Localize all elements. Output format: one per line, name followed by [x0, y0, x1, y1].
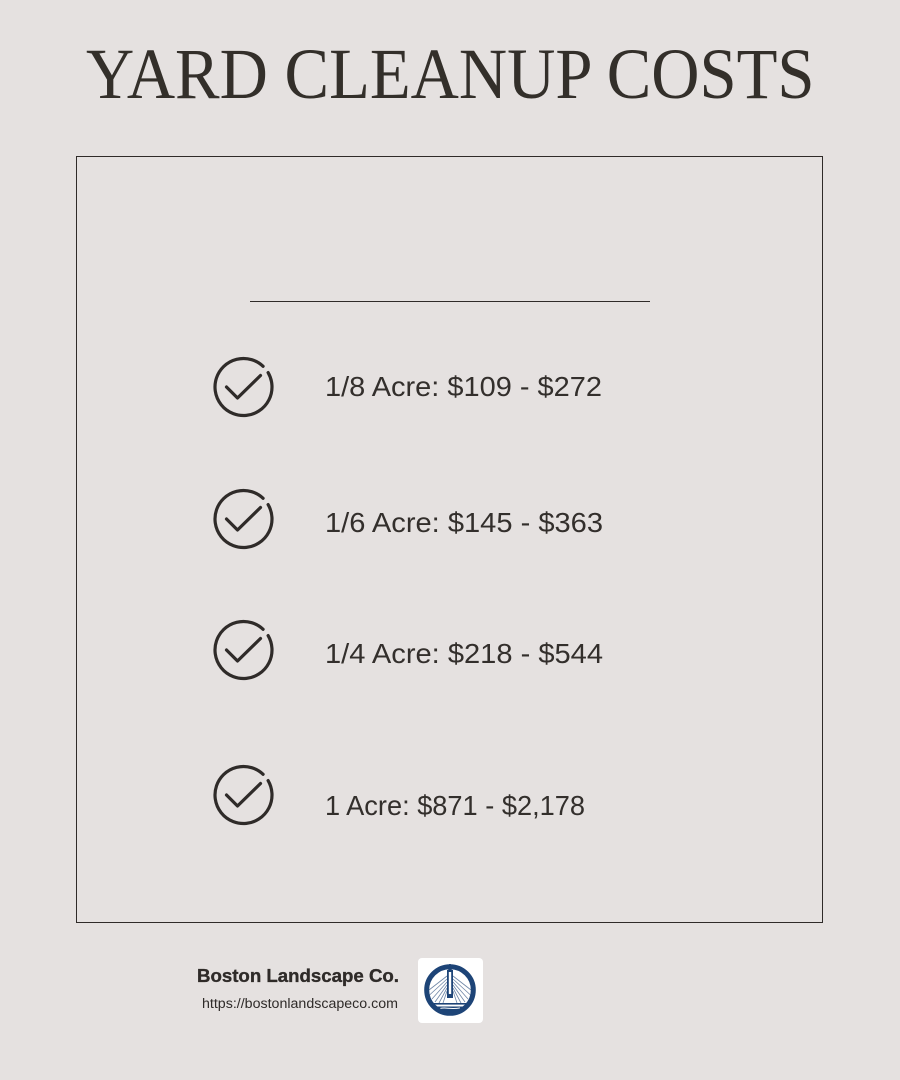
panel: cost list frame — [76, 156, 822, 922]
icon: check 1/8 acre — [215, 358, 272, 415]
icon: check 1 acre — [215, 766, 272, 823]
icon: check 1/4 acre — [215, 621, 272, 678]
logo: bridge badge — [418, 958, 483, 1023]
text: 1/4 acre cost: 1/4 Acre: $218 - $544 — [325, 638, 603, 669]
text: 1/6 acre cost: 1/6 Acre: $145 - $363 — [325, 507, 603, 538]
text: 1/8 acre cost: 1/8 Acre: $109 - $272 — [325, 371, 602, 402]
text: 1 acre cost: 1 Acre: $871 - $2,178 — [325, 790, 585, 821]
title: YARD CLEANUP COSTS — [86, 35, 815, 115]
icon: check 1/6 acre — [215, 490, 272, 547]
footer url: https://bostonlandscapeco.com — [202, 996, 398, 1011]
footer company name: Boston Landscape Co. — [197, 965, 399, 986]
